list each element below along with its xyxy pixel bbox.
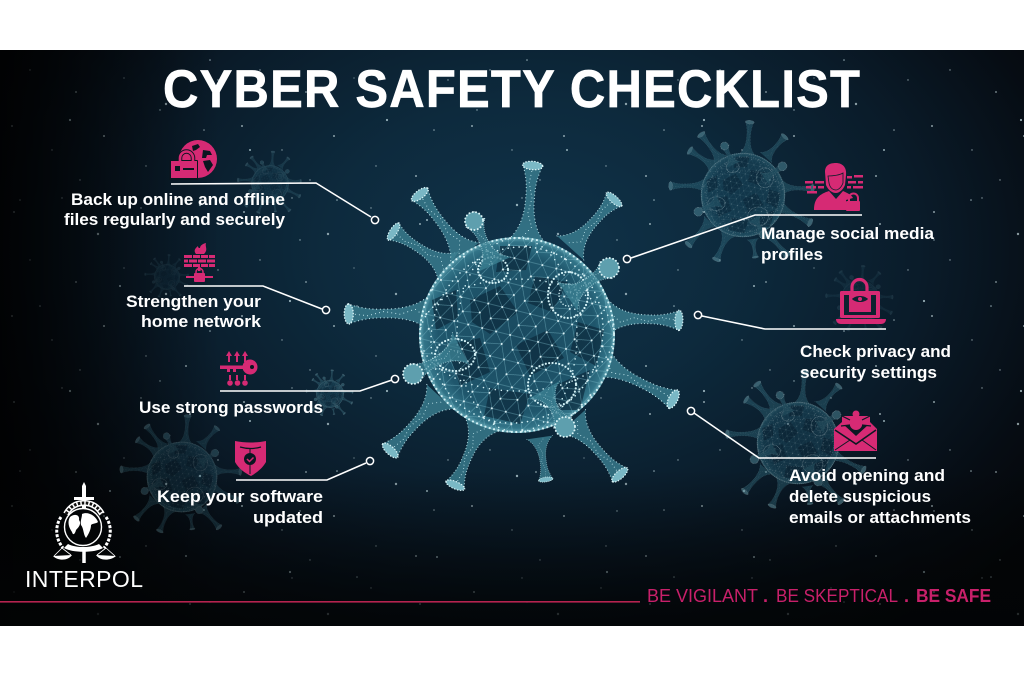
tagline: BE VIGILANT (647, 586, 758, 606)
connector line (631, 215, 862, 258)
label: updated (253, 508, 323, 527)
item: home network (126, 243, 330, 331)
connector node (687, 407, 695, 415)
tagline: BE SKEPTICAL (776, 586, 898, 606)
connector line (171, 183, 371, 217)
tagline: BE SAFE (916, 586, 991, 606)
footer rule (0, 601, 640, 603)
emblem (53, 482, 116, 563)
label: Back up online and offline (71, 190, 285, 209)
tagline (647, 586, 991, 606)
title: CYBER SAFETY CHECKLIST (163, 59, 860, 118)
label: emails or attachments (789, 508, 971, 527)
wordmark: INTERPOL (25, 566, 143, 592)
tagline: . (904, 586, 909, 606)
item: suspicious emails (687, 407, 971, 527)
label: Manage social media (761, 224, 935, 243)
item: software updates (157, 441, 374, 527)
item: strong passwords (139, 351, 399, 417)
connector node (366, 457, 374, 465)
label: security settings (800, 363, 937, 382)
connector line (702, 316, 886, 329)
connector line (694, 413, 876, 458)
item: back up files (64, 140, 379, 229)
background virus: lower right (725, 369, 869, 511)
label: profiles (761, 245, 823, 264)
label: Use strong passwords (139, 398, 323, 417)
label: delete suspicious (789, 487, 931, 506)
label: home network (141, 312, 262, 331)
label: Strengthen your (126, 292, 261, 311)
label: Check privacy and (800, 342, 951, 361)
icon: laptop and lock (836, 280, 886, 324)
connector node (371, 216, 379, 224)
background virus: top left (237, 151, 302, 215)
label: files regularly and securely (64, 210, 286, 229)
Interpol logo (25, 482, 143, 592)
icon: shield (235, 441, 266, 476)
background virus: behind laptop (825, 265, 894, 332)
background virus: lower left (120, 414, 243, 535)
item: privacy settings (694, 280, 951, 382)
item: social media (623, 163, 935, 264)
connector line (184, 286, 322, 309)
connector node (322, 306, 330, 314)
icon: firewall (184, 243, 215, 282)
background virus: behind passwords (306, 369, 354, 417)
connector line (236, 463, 366, 480)
label: Avoid opening and (789, 466, 945, 485)
label: Keep your software (157, 487, 323, 506)
icon: key (220, 351, 258, 386)
central virus illustration (344, 160, 685, 496)
background virus: behind firewall (145, 254, 189, 298)
connector node (694, 311, 702, 319)
icon: person with lock (805, 163, 863, 211)
connector node (623, 255, 631, 263)
background virus: top right (669, 120, 815, 264)
icon: envelope with bug (834, 410, 877, 451)
connector node (391, 375, 399, 383)
tagline: . (763, 586, 768, 606)
icon: globe and lock (169, 140, 217, 180)
connector line (220, 380, 392, 391)
